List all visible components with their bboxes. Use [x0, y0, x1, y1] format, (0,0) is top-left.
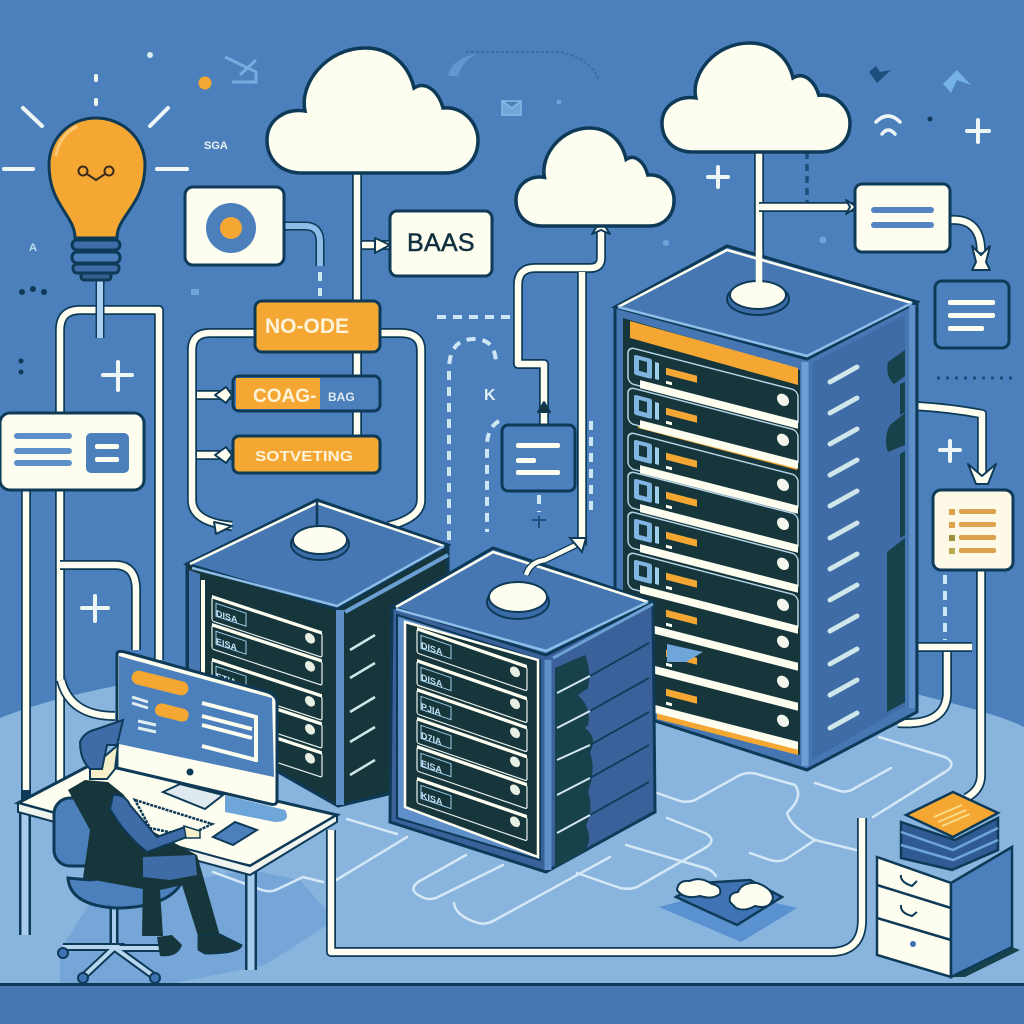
rack disk [727, 281, 789, 315]
cloud middle [516, 128, 674, 226]
front server rack [390, 548, 655, 872]
circle card [185, 187, 284, 265]
NO-CODE label: NO-ODE [265, 315, 349, 338]
dashed connectors [320, 272, 945, 640]
front server rack: KISA [421, 790, 443, 807]
top right card [855, 184, 950, 252]
cloud right [662, 43, 850, 152]
COAG label: BAG [328, 390, 355, 404]
orange top strip [630, 321, 798, 385]
monitor [117, 651, 277, 809]
COAG label: COAG- [253, 386, 316, 407]
rack top [615, 246, 917, 359]
list document card [933, 490, 1013, 570]
BAAS label: BAAS [407, 229, 475, 257]
plus icons [82, 362, 960, 621]
keyboard [135, 800, 212, 836]
book stack [901, 818, 998, 870]
legs [142, 855, 220, 936]
filing cabinet with books [877, 792, 1020, 977]
left server rack: ETIA [216, 671, 237, 688]
bottom band [0, 983, 1024, 1024]
left server rack [187, 500, 448, 806]
left server rack: DISA [216, 608, 238, 625]
small blue card [502, 425, 575, 491]
arrow heads [214, 200, 996, 534]
front server rack: D7IA [421, 730, 442, 747]
rack vents [830, 367, 857, 728]
rack front [623, 318, 800, 755]
arm [110, 795, 187, 852]
icon: light bulb [4, 76, 187, 280]
decorative icons: top left [18, 52, 256, 374]
left card [0, 413, 144, 490]
decorative icons: top left: A [29, 242, 37, 254]
front server rack: DISA [421, 672, 443, 689]
floor circuit lines [213, 737, 952, 924]
arrow from front rack to network [526, 538, 586, 575]
office chair [54, 798, 183, 983]
cloud left [267, 48, 478, 173]
desk [18, 760, 337, 970]
orange bottom strip [657, 705, 798, 755]
front server rack: PJIA [421, 701, 441, 718]
decorative icons: top left: SGA [204, 140, 228, 152]
floor shadow under desk [60, 870, 335, 985]
front server rack: EISA [421, 758, 442, 775]
cabinet side [951, 847, 1012, 977]
person at desk [68, 720, 242, 956]
head [90, 745, 118, 779]
SOTVETING label: SOTVETING [255, 448, 353, 465]
cabinet front [877, 857, 951, 977]
monitor screen [119, 656, 274, 777]
NO-CODE label [255, 301, 380, 352]
pole onto tall rack [756, 250, 762, 285]
connector pipes [26, 150, 982, 952]
left server rack: EISA [216, 636, 237, 653]
rack side panel [812, 315, 905, 760]
K label: K [484, 387, 496, 404]
server units [628, 347, 798, 750]
tall server rack [615, 246, 917, 770]
SOTVETING label [233, 436, 380, 473]
decorative icons: top right [448, 52, 1014, 378]
COAG label [233, 376, 380, 411]
cloud tray on floor [659, 879, 797, 942]
torso [68, 780, 197, 889]
mouse pad [213, 822, 257, 845]
BAAS label [390, 211, 492, 276]
orange middle strip [638, 419, 797, 470]
front server rack: DISA [421, 640, 443, 657]
floor [0, 635, 1024, 985]
right blue card [935, 281, 1009, 348]
